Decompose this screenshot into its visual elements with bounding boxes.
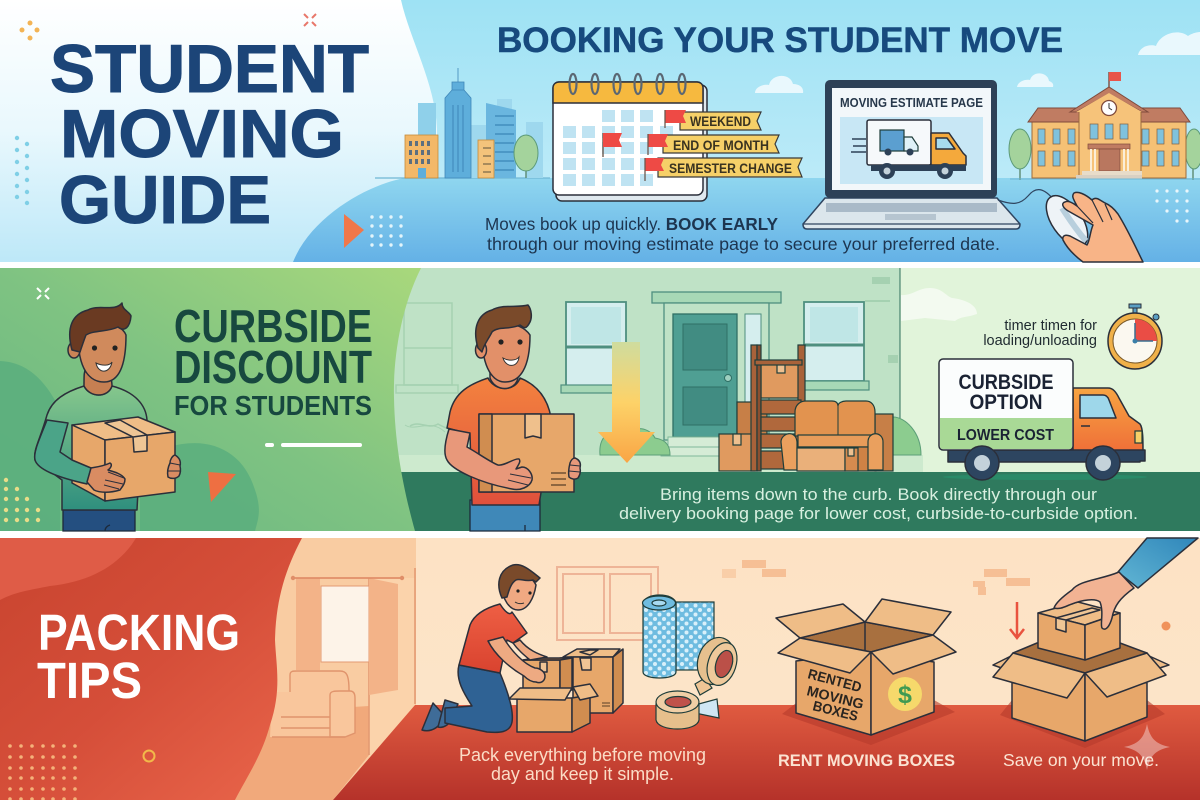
text: curbside option: OPTION	[970, 391, 1042, 414]
illustration: stack of packed boxes	[523, 649, 623, 713]
sofa	[781, 401, 883, 471]
forearm	[35, 420, 91, 484]
icon: decorative ring and dots	[8, 744, 155, 800]
icon: orange dot	[1162, 622, 1170, 630]
shoes	[422, 703, 442, 731]
text: curbside caption: Bring items down to the curb. Book directly through our	[660, 486, 1098, 504]
head	[482, 324, 530, 382]
icon: calendar rings	[570, 74, 686, 94]
illustration: rented moving box	[776, 599, 956, 745]
panel: booking your student move	[0, 0, 1200, 262]
text: rented moving boxes label: RENTED	[806, 665, 863, 695]
text: curbside option	[958, 371, 1054, 414]
text: rent moving boxes: RENT MOVING BOXES	[778, 751, 955, 770]
background: lighter top-left shape	[0, 538, 136, 600]
icon: middle flag	[603, 133, 622, 157]
icon: yellow dots	[4, 478, 40, 522]
heading: curbside discount for students: CURBSIDE	[174, 300, 372, 352]
heading: packing tips: PACKING	[38, 604, 240, 661]
title: student moving guide: MOVING	[60, 96, 344, 172]
icon: white sparkle	[37, 288, 49, 299]
sweater	[35, 386, 147, 510]
illustration: nested box with hand	[993, 538, 1198, 748]
jeans	[63, 510, 135, 531]
text: curbside caption: delivery booking page for lower cost, curbside-to-curbside option.	[619, 505, 1138, 523]
background: lower ground band	[0, 178, 1200, 262]
icon: dollar coin: $	[898, 681, 912, 709]
window in side room	[321, 586, 369, 662]
text: timer caption: loading/unloading	[983, 333, 1097, 349]
background: red floor	[333, 705, 1200, 800]
icon: decorative dots right	[1155, 189, 1189, 223]
heading: booking your student move: BOOKING YOUR STUDENT MOVE	[497, 21, 1063, 60]
illustration: open box	[509, 684, 598, 732]
illustration: city skyline	[375, 68, 550, 178]
heading: curbside discount for students: FOR STUDENTS	[174, 390, 372, 421]
arm and hands	[445, 429, 580, 490]
text: rented moving boxes label	[805, 665, 866, 724]
heading: packing tips: TIPS	[37, 652, 142, 709]
heading: curbside discount for students	[174, 300, 372, 421]
illustration: hand on computer mouse	[998, 189, 1143, 262]
text: rented moving boxes label: MOVING	[805, 682, 866, 712]
text: pack everything caption	[459, 745, 706, 784]
panel: curbside discount for students	[0, 268, 1200, 531]
text: book early caption: Moves book up quickly. BOOK EARLY	[485, 214, 778, 234]
label: end of month: END OF MONTH	[673, 138, 769, 153]
head	[78, 324, 126, 382]
red shirt	[459, 604, 527, 673]
hands	[87, 455, 180, 492]
truck wheels	[965, 446, 1120, 480]
front arm and hand	[488, 637, 545, 683]
heading: curbside discount for students: DISCOUNT	[174, 341, 372, 393]
illustration: packing tapes	[656, 633, 742, 729]
title: student moving guide	[50, 31, 369, 238]
illustration: bricks on wall	[722, 560, 1030, 595]
box	[72, 417, 175, 501]
text: lower cost: LOWER COST	[957, 427, 1054, 444]
background: right sky	[900, 268, 1200, 472]
arrow: red down arrow	[1010, 602, 1024, 638]
title: student moving guide: GUIDE	[59, 162, 271, 238]
text: pack everything caption: Pack everything before moving	[459, 745, 706, 765]
icon: delivery truck on screen	[851, 120, 966, 179]
background: darker green blobs	[0, 361, 259, 531]
label: semester change	[645, 158, 802, 181]
faint left window	[396, 303, 458, 434]
label: weekend	[665, 110, 761, 130]
heading: packing tips	[37, 604, 240, 709]
panel: packing tips	[0, 538, 1200, 800]
illustration: house front	[393, 277, 1200, 531]
label: semester change: SEMESTER CHANGE	[669, 161, 792, 176]
front door	[652, 292, 781, 456]
label: weekend: WEEKEND	[690, 114, 751, 129]
jeans	[445, 665, 512, 732]
icon: stopwatch	[1108, 304, 1162, 369]
text: book early caption	[485, 214, 1000, 254]
icon: clouds	[755, 32, 1200, 93]
text: timer caption: timer timen for	[1004, 318, 1097, 334]
calendar day grid	[563, 110, 673, 186]
icon: orange triangle	[208, 472, 236, 502]
illustration: student in green sweater holding box	[35, 303, 180, 531]
icon: clock	[1102, 100, 1116, 116]
window 3	[801, 302, 869, 390]
text: curbside option: CURBSIDE	[958, 371, 1054, 394]
background: red title wave	[0, 538, 302, 800]
background: title area wave	[0, 0, 437, 262]
illustration: man packing boxes	[422, 565, 547, 732]
small box	[1038, 602, 1120, 660]
window 2	[561, 302, 632, 393]
back arm	[513, 640, 547, 660]
icon: hand and sleeve	[1054, 538, 1198, 629]
illustration: furniture and boxes at curb	[719, 345, 893, 471]
illustration: wall window	[557, 567, 658, 640]
head	[502, 575, 536, 610]
text: rented moving boxes label: BOXES	[811, 697, 860, 724]
text: curbside caption	[619, 486, 1138, 523]
bushes	[600, 429, 670, 455]
illustration: student in orange shirt holding box	[445, 305, 580, 531]
text: timer caption	[983, 318, 1097, 349]
icon: sparkle	[1124, 724, 1170, 770]
text: book early caption: through our moving estimate page to secure your preferred date.	[487, 234, 1000, 254]
background: left green wave	[0, 268, 421, 531]
illustration: bubble wrap roll	[642, 595, 714, 678]
text: pack everything caption: day and keep it simple.	[491, 764, 674, 784]
title: student moving guide: STUDENT	[50, 31, 369, 107]
background: side room	[235, 538, 416, 800]
illustration: laptop showing moving estimate page	[803, 80, 1020, 229]
text: moving estimate page: MOVING ESTIMATE PAGE	[840, 95, 983, 110]
decorative dash	[265, 443, 362, 447]
icon: decorative dots and marks in title area	[15, 14, 403, 248]
illustration: school building	[1009, 72, 1200, 180]
illustration: calendar with flags	[553, 74, 802, 201]
label: end of month	[648, 134, 779, 155]
text: save on your move: Save on your move.	[1003, 750, 1159, 770]
icon: dollar coin	[888, 677, 922, 711]
box	[479, 414, 574, 492]
arrow: bring items down	[598, 342, 655, 463]
curtains	[296, 578, 398, 695]
illustration: curbside truck	[939, 359, 1147, 480]
faint armchair	[270, 671, 355, 737]
icon: cloud	[901, 288, 977, 321]
